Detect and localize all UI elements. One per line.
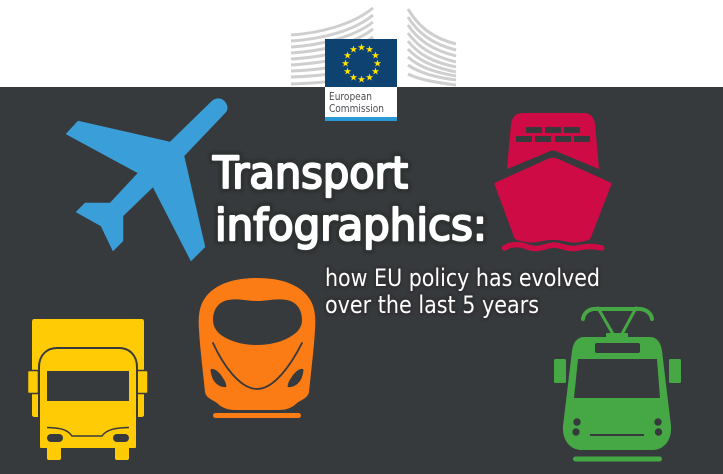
icon: ship — [496, 113, 610, 249]
logo stars: ★ — [371, 66, 380, 78]
logo stars: ★ — [365, 72, 374, 84]
icon: Berlaymont building — [291, 8, 456, 85]
ship superstructure — [507, 113, 599, 169]
logo stars: ★ — [373, 58, 382, 70]
logo wordmark: European — [329, 90, 372, 103]
logo stars: ★ — [371, 50, 380, 62]
subtitle halo: over the last 5 years — [325, 291, 539, 319]
train headlights — [211, 369, 226, 387]
logo stars — [341, 42, 382, 86]
train windscreen — [213, 299, 302, 345]
logo stars: ★ — [349, 72, 358, 84]
logo blue stripe — [325, 117, 397, 121]
logo stars: ★ — [349, 44, 358, 56]
title halo: infographics: — [215, 200, 487, 251]
ship hull — [496, 159, 610, 241]
ship wave — [504, 244, 602, 249]
truck bumper line — [47, 428, 129, 436]
truck headlights — [47, 434, 63, 442]
logo wordmark: Commission — [329, 102, 384, 115]
tram pantograph base — [606, 333, 628, 339]
tram side mirrors — [554, 359, 566, 383]
train nose line — [213, 343, 302, 389]
subtitle halo — [325, 264, 600, 319]
logo stars: ★ — [365, 44, 374, 56]
title: infographics: — [215, 200, 487, 251]
title — [212, 148, 487, 251]
train rail — [213, 413, 301, 418]
truck wheels — [47, 445, 61, 460]
logo flag — [325, 39, 397, 87]
logo: European Commission — [325, 39, 397, 121]
icon: tram — [554, 308, 681, 462]
truck side mirrors — [28, 370, 148, 394]
tram body — [563, 337, 671, 450]
truck cargo box — [32, 319, 144, 417]
subtitle — [325, 264, 600, 319]
truck cab — [39, 348, 137, 449]
ship windows — [516, 127, 590, 142]
truck windscreen — [47, 371, 129, 401]
subtitle: how EU policy has evolved — [325, 264, 600, 292]
logo stars: ★ — [341, 58, 350, 70]
tram headlights — [572, 418, 662, 436]
tram bumper line — [590, 434, 644, 436]
icon: high-speed train — [199, 278, 315, 418]
tram destination board — [595, 343, 640, 353]
logo stars: ★ — [343, 66, 352, 78]
subtitle: over the last 5 years — [325, 291, 539, 319]
logo wordmark — [329, 90, 384, 115]
icon: aeroplane — [66, 99, 227, 261]
title halo: Transport — [212, 148, 408, 199]
logo stars: ★ — [357, 74, 366, 86]
tram rail — [573, 456, 662, 462]
icon: truck — [28, 319, 148, 460]
tram windscreen — [574, 359, 660, 398]
subtitle halo: how EU policy has evolved — [325, 264, 600, 292]
logo stars: ★ — [357, 42, 366, 54]
tram pantograph — [583, 308, 652, 334]
title: Transport — [212, 148, 408, 199]
train body — [199, 278, 315, 410]
title halo — [212, 148, 487, 251]
logo stars: ★ — [343, 50, 352, 62]
